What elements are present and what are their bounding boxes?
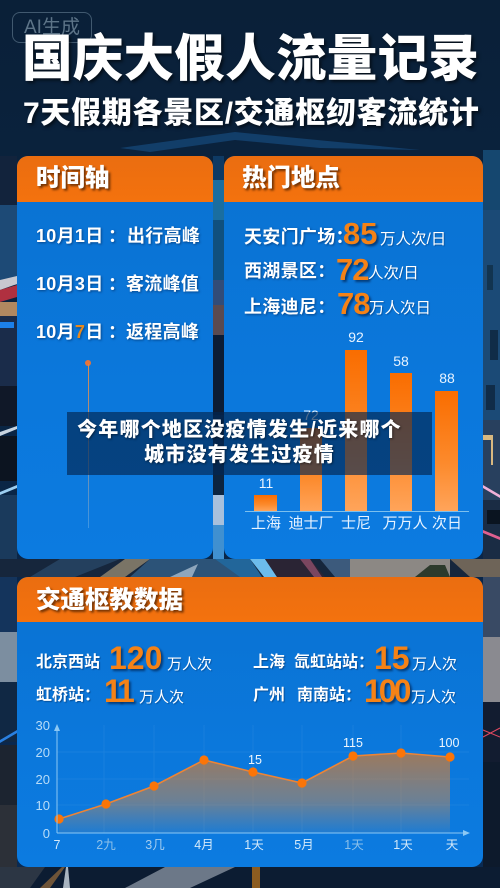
hub stat: 北京西站: 120 [109,640,162,676]
timeline row: October 7: 返程高峰 [126,322,199,342]
bar: 迪士厂 72 [288,407,334,532]
bar: 迪士厂 72: 72 [303,407,319,423]
timeline row: October 1: 10月1日 [36,226,104,246]
hubs header: 交通枢教数据 [36,587,183,614]
overlay caption banner [67,412,432,475]
caption text [77,418,402,466]
hub stat: 北京西站 [36,640,212,676]
area series [59,753,450,833]
hub stat: 广州南站: 万人次 [411,689,456,706]
hub stat: 上海 虹桥 [253,640,458,676]
bar: 万万人 58: 58 [393,353,409,369]
timeline row: October 7: ： [108,322,126,342]
value labels: 100 [439,736,459,750]
hub stat: 广州南站: 广州 [253,687,285,704]
y axis labels: 30 [36,718,50,733]
title: 国庆大假人流量记录 [22,30,479,87]
timeline row: October 1: ： [108,226,126,246]
x axis labels: 5月 [294,838,314,852]
timeline header: 时间轴 [36,165,110,192]
x axis labels: 4月 [194,838,214,852]
hub stat: 上海 虹桥: 氙虹站站： [294,654,374,671]
bar: 士尼 92: 士尼 [341,515,371,532]
panel: timeline [17,156,213,559]
bar: 万万人 58: 万万人 [382,515,428,532]
timeline row: October 7: 10月7日 [36,322,104,342]
timeline row: October 1 [36,226,201,246]
hub stat: 广州南站: 100 [364,673,408,709]
caption text: 今年哪个地区没疫情发生/近来哪个 [77,419,402,441]
bar chart baseline [245,511,469,512]
bar: 万万人 58 [382,353,428,532]
x axis labels [54,838,459,852]
place row: West Lake: 72 [336,252,368,287]
bar: 士尼 92: 92 [348,329,364,345]
places header [224,156,483,202]
value labels: 15 [248,753,262,767]
hub stat: 上海 虹桥: 15 [374,640,410,676]
x axis labels: 2九 [96,838,116,852]
line series [59,753,450,819]
timeline row: October 1: 出行高峰 [127,226,200,246]
place row: Shanghai Disney: 上海迪尼： [244,297,336,317]
hub stat: 上海 虹桥: 万人次 [412,656,457,673]
timeline row: October 3: 客流峰值 [126,274,199,294]
x axis labels: 1天 [393,838,413,852]
hub stat: 北京西站: 北京西站 [36,654,100,671]
bar: 次日 88 [432,370,462,532]
bar: 上海 11 [251,475,281,532]
timeline row: October 3 [36,274,200,294]
timeline marker line [85,360,91,528]
axes [54,724,470,836]
hub stat: 北京西站: 万人次 [167,656,212,673]
panel: popular places [224,156,483,559]
x axis labels: 1天 [344,838,364,852]
hub stat: 虹桥站: 万人次 [139,689,184,706]
timeline header [17,156,213,202]
timeline row: October 7 [36,322,200,342]
hub stat: 上海 虹桥: 上海 [253,654,285,671]
places header: 热门地点 [242,165,340,192]
place row: Tiananmen: 万人次/日 [380,231,446,248]
bar: 上海 11: 11 [259,475,273,491]
bar: 次日 88: 次日 [432,515,462,532]
hub stat: 广州南站 [253,673,456,709]
x axis labels: 1天 [244,838,264,852]
hubs header [17,577,483,622]
place row: West Lake: 西湖景区： [244,261,336,281]
bar: 上海 11: 上海 [251,515,281,532]
bar: 士尼 92 [341,329,371,532]
line chart [36,718,470,852]
x axis labels: 3几 [145,838,165,852]
hub stat: 虹桥站: 虹桥站： [36,687,100,704]
y axis labels: 0 [43,826,50,841]
panel: transport hubs [17,577,483,867]
x axis labels: 7 [54,838,61,852]
place row: Shanghai Disney: 78 [337,286,369,321]
place row: West Lake: 人次/日 [368,265,419,282]
place row: Tiananmen [244,216,446,251]
subtitle: 7天假期各景区/交通枢纫客流统计 [23,97,480,130]
bar chart [245,329,469,532]
x axis labels: 天 [446,838,459,852]
data points [54,748,455,824]
y axis labels: 10 [36,798,50,813]
timeline row: October 3: ： [108,274,126,294]
y axis labels [36,718,50,841]
caption text: 城市没有发生过疫情 [144,444,335,466]
y axis labels: 20 [36,772,50,787]
hub stat: 虹桥站 [36,673,184,709]
place row: Shanghai Disney: 万人次日 [369,300,431,317]
y axis labels: 20 [36,745,50,760]
place row: Shanghai Disney [244,286,431,321]
badge: AI生成 [12,12,92,43]
hub stat: 虹桥站: 11 [104,673,132,709]
bar: 次日 88: 88 [439,370,455,386]
place row: Tiananmen: 85 [343,216,377,251]
place row: Tiananmen: 天安门广场： [244,227,354,247]
badge: AI生成: AI生成 [24,17,80,38]
value labels [248,736,459,767]
timeline row: October 3: 10月3日 [36,274,104,294]
bar: 迪士厂 72: 迪士厂 [288,515,334,532]
value labels: 115 [343,736,363,750]
hub stat: 广州南站: 南南站： [297,687,361,704]
place row: West Lake [244,252,419,287]
